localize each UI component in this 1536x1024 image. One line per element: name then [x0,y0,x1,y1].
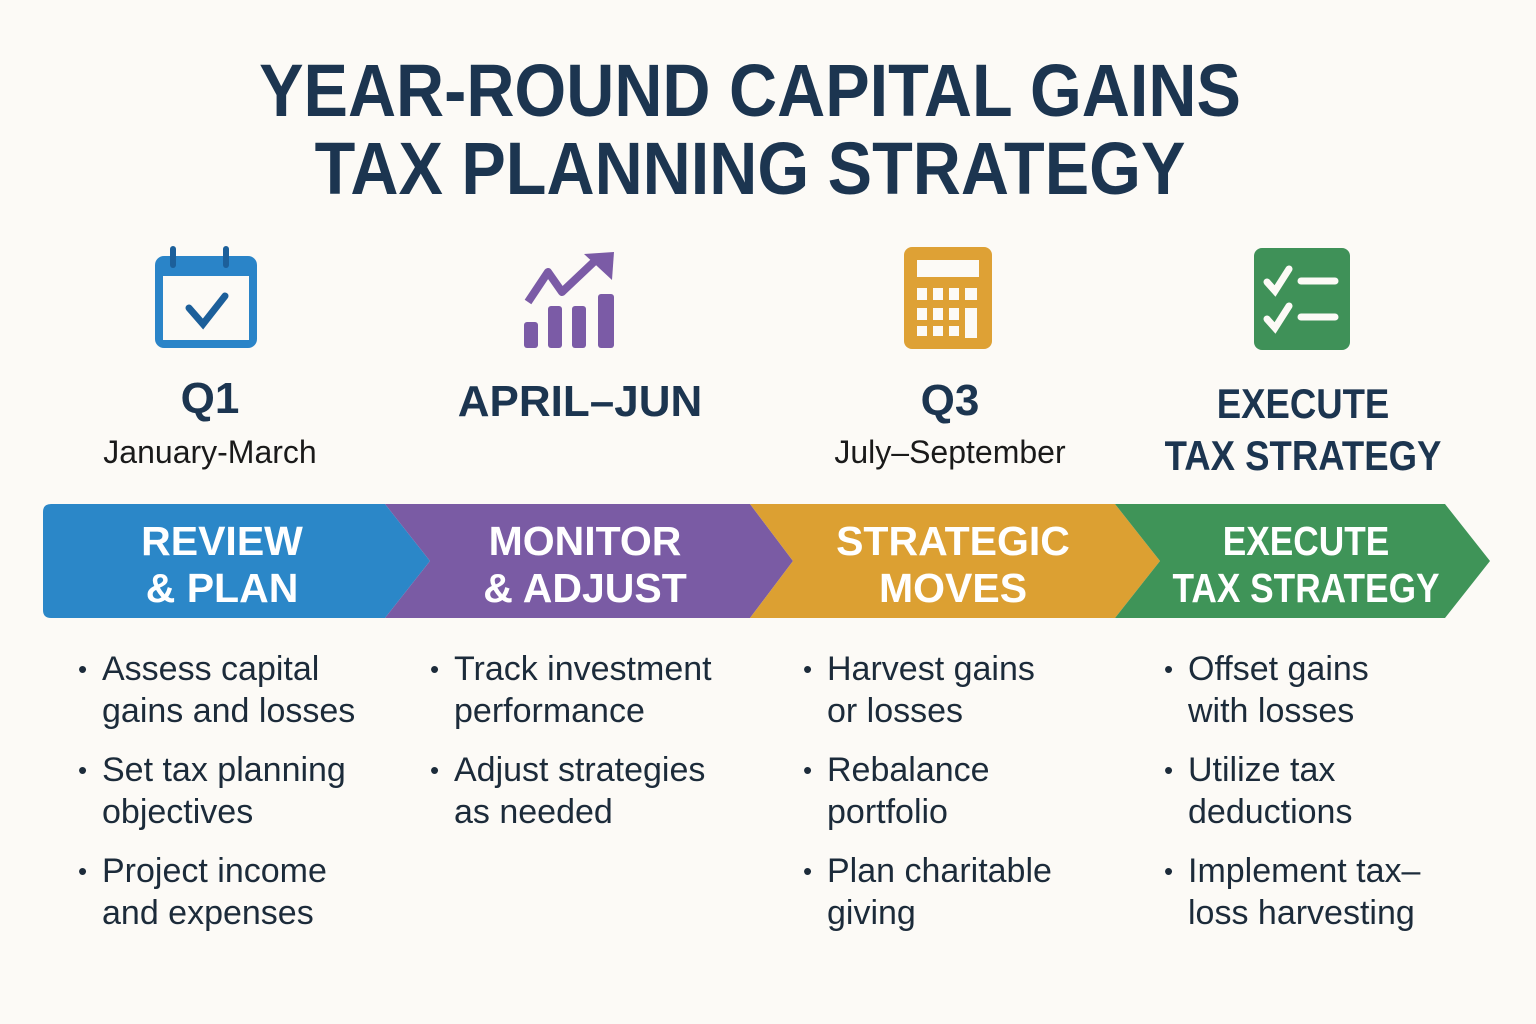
bar label: review [141,518,303,611]
bullets: col3: giving [827,894,916,932]
bullets: col4: Utilize tax [1188,751,1335,789]
icon: checklist [1254,248,1350,350]
bar label: execute [1172,518,1440,611]
bullets: col1 [79,650,355,932]
heading: Q3 [834,376,1066,470]
bullets: col1: gains and losses [102,692,355,730]
bullets: col4: Implement tax– [1188,852,1420,890]
bar label: monitor: MONITOR [489,518,681,564]
bullets: col3: Rebalance [827,751,990,789]
bar label: strategic: STRATEGIC [836,518,1070,564]
heading: April-Jun: APRIL–JUN [458,377,702,426]
bullets: col4: deductions [1188,793,1352,831]
bullets: col2: as needed [454,793,613,831]
bullets: col3: portfolio [827,793,948,831]
bullets: col2 [431,650,712,831]
bullets: col1: Set tax planning [102,751,346,789]
bar label: review: & PLAN [146,565,298,611]
heading: Q3: Q3 [921,376,979,425]
bar label: strategic: MOVES [879,565,1027,611]
bullets: col1: and expenses [102,894,314,932]
icon: chart [524,252,614,348]
bullets: col4 [1165,650,1420,932]
bullets: col3 [804,650,1052,932]
icon: calculator [904,247,992,349]
bar label: review: REVIEW [141,518,303,564]
bullets: col3: Plan charitable [827,852,1052,890]
bar label: execute: EXECUTE [1223,518,1389,564]
heading: Q1: January-March [103,434,317,470]
heading: Execute: EXECUTE [1217,380,1389,427]
icon: calendar [155,246,257,348]
heading: Q1: Q1 [181,374,239,423]
title: TAX PLANNING STRATEGY [315,127,1185,210]
heading: Execute: TAX STRATEGY [1165,432,1441,479]
bullets: col2: performance [454,692,645,730]
bar label: monitor [483,518,687,611]
bullets: col1: Assess capital [102,650,319,688]
bullets: col3: or losses [827,692,963,730]
bullets: col4: with losses [1188,692,1354,730]
bullets: col1: Project income [102,852,327,890]
heading: Q3: July–September [834,434,1066,470]
bullets: col1: objectives [102,793,253,831]
bar label: execute: TAX STRATEGY [1172,565,1440,611]
bar label: monitor: & ADJUST [483,565,687,611]
heading: Q1 [103,374,317,470]
title [259,49,1241,210]
title: YEAR-ROUND CAPITAL GAINS [259,49,1241,132]
bullets: col3: Harvest gains [827,650,1035,688]
heading: Execute [1165,380,1441,479]
bullets: col4: Offset gains [1188,650,1369,688]
bullets: col4: loss harvesting [1188,894,1415,932]
bullets: col2: Adjust strategies [454,751,705,789]
bar label: strategic [836,518,1070,611]
bullets: col2: Track investment [454,650,712,688]
